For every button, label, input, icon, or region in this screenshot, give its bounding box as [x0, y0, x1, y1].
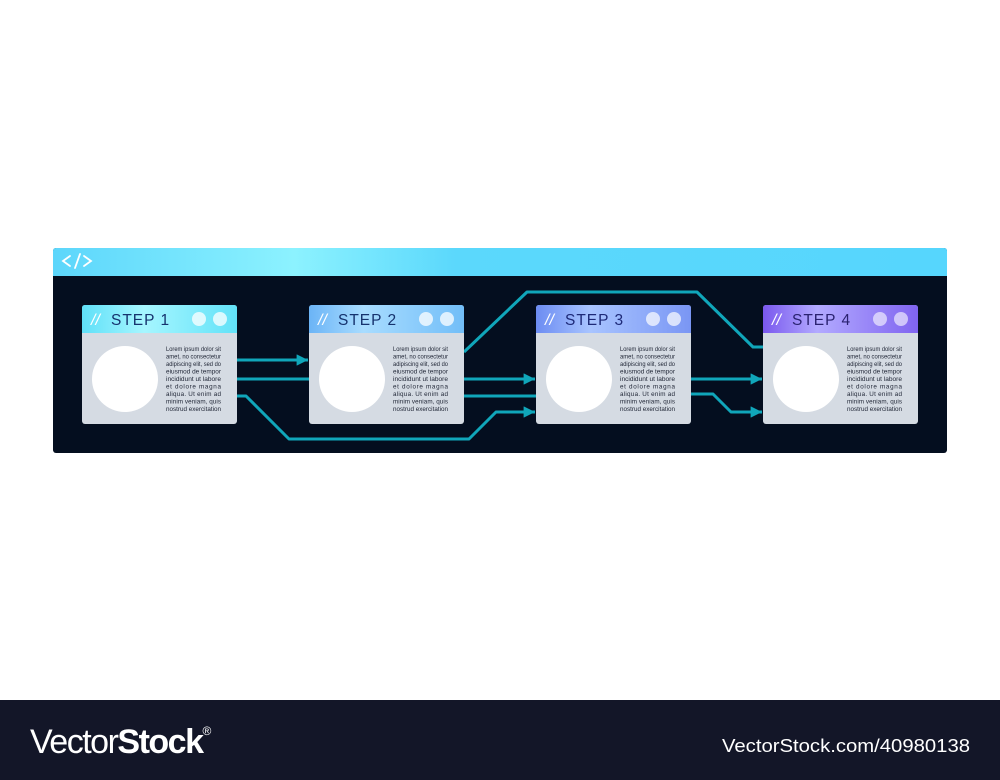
icon placeholder circle: [546, 346, 612, 412]
text block: aliqua. Ut enim ad: [393, 391, 448, 398]
card: step 1: //: [90, 312, 101, 329]
text block: minim veniam, quis: [393, 398, 448, 406]
text block: incididunt ut labore: [393, 376, 449, 383]
text block: et dolore magna: [393, 384, 448, 390]
text block: adipiscing elit, sed do: [620, 361, 675, 368]
card: step 1: STEP 1: [111, 312, 170, 329]
text block: et dolore magna: [847, 384, 902, 390]
text block: nostrud exercitation: [166, 406, 221, 413]
icon placeholder circle: [92, 346, 158, 412]
card: step 3: STEP 3: [565, 312, 624, 329]
card: step 4: [763, 305, 918, 424]
text block: [847, 346, 903, 413]
text block: [620, 346, 676, 413]
text block: minim veniam, quis: [166, 398, 221, 406]
card: step 3: [536, 305, 691, 424]
text block: nostrud exercitation: [847, 406, 902, 413]
text block: eiusmod de tempor: [166, 368, 221, 376]
text block: amet, no consectetur: [847, 354, 902, 360]
text block: Lorem ipsum dolor sit: [393, 346, 448, 353]
icon placeholder circle: [319, 346, 385, 412]
icon: code brackets: [63, 254, 91, 268]
text block: amet, no consectetur: [393, 354, 448, 360]
text block: adipiscing elit, sed do: [847, 361, 902, 368]
text block: adipiscing elit, sed do: [166, 361, 221, 368]
card: step 3: //: [544, 312, 555, 329]
card: step 4: STEP 4: [792, 312, 851, 329]
footer logo: ®: [202, 724, 211, 738]
text block: amet, no consectetur: [620, 354, 675, 360]
text block: incididunt ut labore: [166, 376, 222, 383]
text block: eiusmod de tempor: [620, 368, 675, 376]
card: step 4: //: [771, 312, 782, 329]
text block: [393, 346, 449, 413]
text block: et dolore magna: [166, 384, 221, 390]
text block: nostrud exercitation: [620, 406, 675, 413]
text block: aliqua. Ut enim ad: [847, 391, 902, 398]
card: step 2: STEP 2: [338, 312, 397, 329]
icon placeholder circle: [773, 346, 839, 412]
text block: aliqua. Ut enim ad: [620, 391, 675, 398]
text block: Lorem ipsum dolor sit: [620, 346, 675, 353]
text block: Lorem ipsum dolor sit: [847, 346, 902, 353]
panel: code window: [53, 248, 947, 453]
text block: eiusmod de tempor: [847, 368, 902, 376]
connector lines: [237, 292, 763, 439]
text block: [166, 346, 222, 413]
text block: minim veniam, quis: [620, 398, 675, 406]
footer logo: VectorStock: [30, 723, 202, 761]
text block: aliqua. Ut enim ad: [166, 391, 221, 398]
window header bar: [53, 248, 947, 276]
text block: eiusmod de tempor: [393, 368, 448, 376]
text block: amet, no consectetur: [166, 354, 221, 360]
text block: incididunt ut labore: [620, 376, 676, 383]
card: step 2: [309, 305, 464, 424]
card: step 2: //: [317, 312, 328, 329]
text block: et dolore magna: [620, 384, 675, 390]
text block: minim veniam, quis: [847, 398, 902, 406]
footer url: VectorStock.com/40980138: [722, 736, 970, 756]
text block: nostrud exercitation: [393, 406, 448, 413]
card: step 1: [82, 305, 237, 424]
footer bar: [0, 700, 1000, 780]
text block: incididunt ut labore: [847, 376, 903, 383]
text block: adipiscing elit, sed do: [393, 361, 448, 368]
text block: Lorem ipsum dolor sit: [166, 346, 221, 353]
